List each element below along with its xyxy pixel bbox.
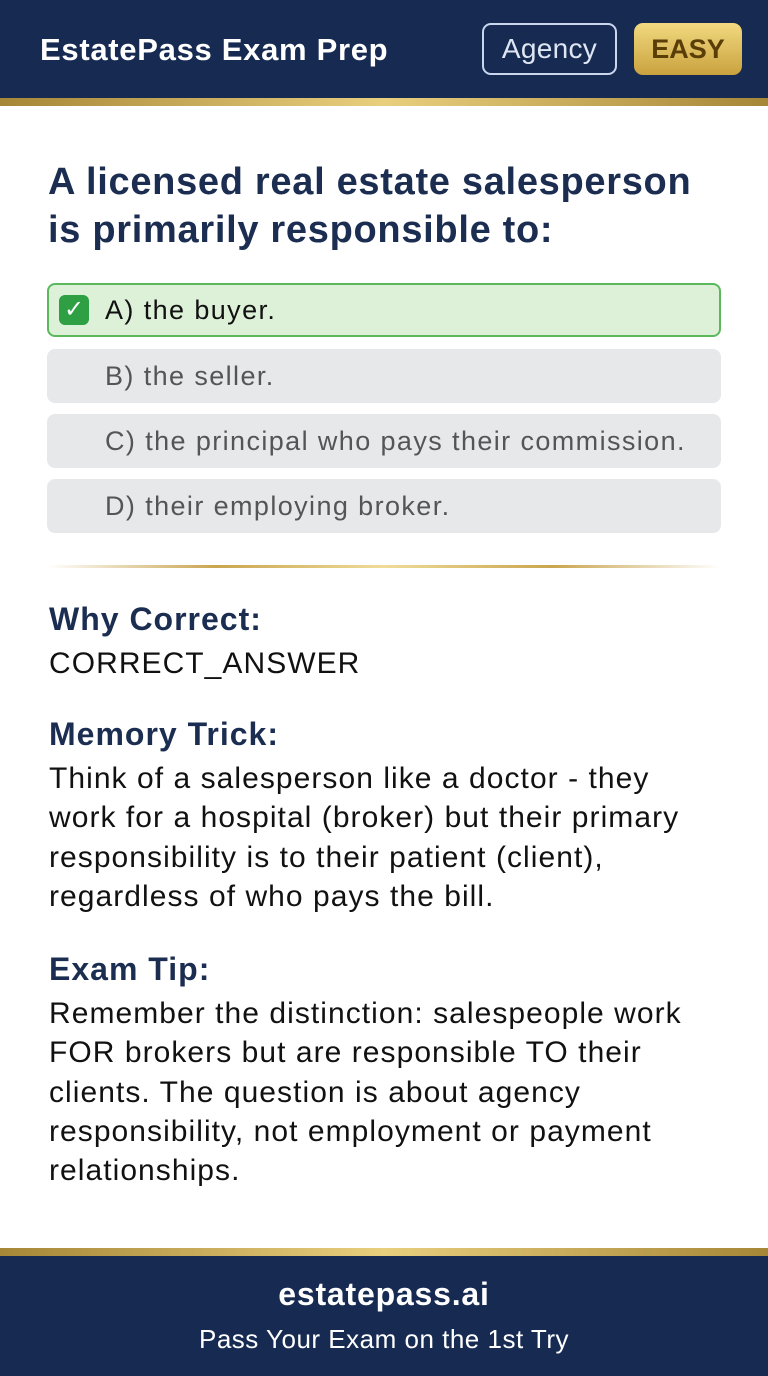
exam tip: clients. The question is about agency — [49, 1076, 581, 1109]
option D — [47, 479, 721, 533]
tag: EASY: EASY — [651, 34, 725, 64]
question heading: A licensed real estate salesperson — [48, 161, 691, 203]
footer — [0, 1248, 768, 1376]
memory trick: Think of a salesperson like a doctor - they — [49, 762, 649, 795]
option A correct: ✓ — [64, 296, 84, 323]
option B — [47, 349, 721, 403]
memory trick — [49, 716, 679, 913]
header — [0, 0, 768, 106]
footer tagline: Pass Your Exam on the 1st Try — [199, 1324, 569, 1354]
why correct — [49, 601, 360, 680]
option C: C) the principal who pays their commission. — [105, 426, 686, 456]
option A correct — [47, 283, 721, 337]
tag: Agency — [482, 23, 617, 75]
memory trick: Memory Trick: — [49, 716, 279, 752]
exam tip: Remember the distinction: salespeople work — [49, 997, 682, 1030]
why correct: CORRECT_ANSWER — [49, 647, 360, 680]
footer site: estatepass.ai — [278, 1276, 490, 1312]
exam tip — [49, 951, 682, 1187]
exam tip: responsibility, not employment or payment — [49, 1115, 652, 1148]
option B: B) the seller. — [105, 361, 275, 391]
option D: D) their employing broker. — [105, 491, 451, 521]
memory trick: responsibility is to their patient (client), — [49, 841, 604, 874]
tag: Agency: Agency — [502, 33, 597, 64]
option C — [47, 414, 721, 468]
header title: EstatePass Exam Prep — [40, 32, 388, 67]
question heading — [48, 161, 691, 251]
options — [47, 283, 721, 533]
memory trick: work for a hospital (broker) but their primary — [49, 801, 679, 834]
exam tip: relationships. — [49, 1154, 240, 1187]
exam tip: Exam Tip: — [49, 951, 210, 987]
why correct: Why Correct: — [49, 601, 262, 637]
option A correct: A) the buyer. — [105, 295, 276, 325]
question heading: is primarily responsible to: — [48, 209, 553, 251]
tag: EASY — [634, 23, 742, 75]
exam tip: FOR brokers but are responsible TO their — [49, 1036, 642, 1069]
memory trick: regardless of who pays the bill. — [49, 880, 494, 913]
